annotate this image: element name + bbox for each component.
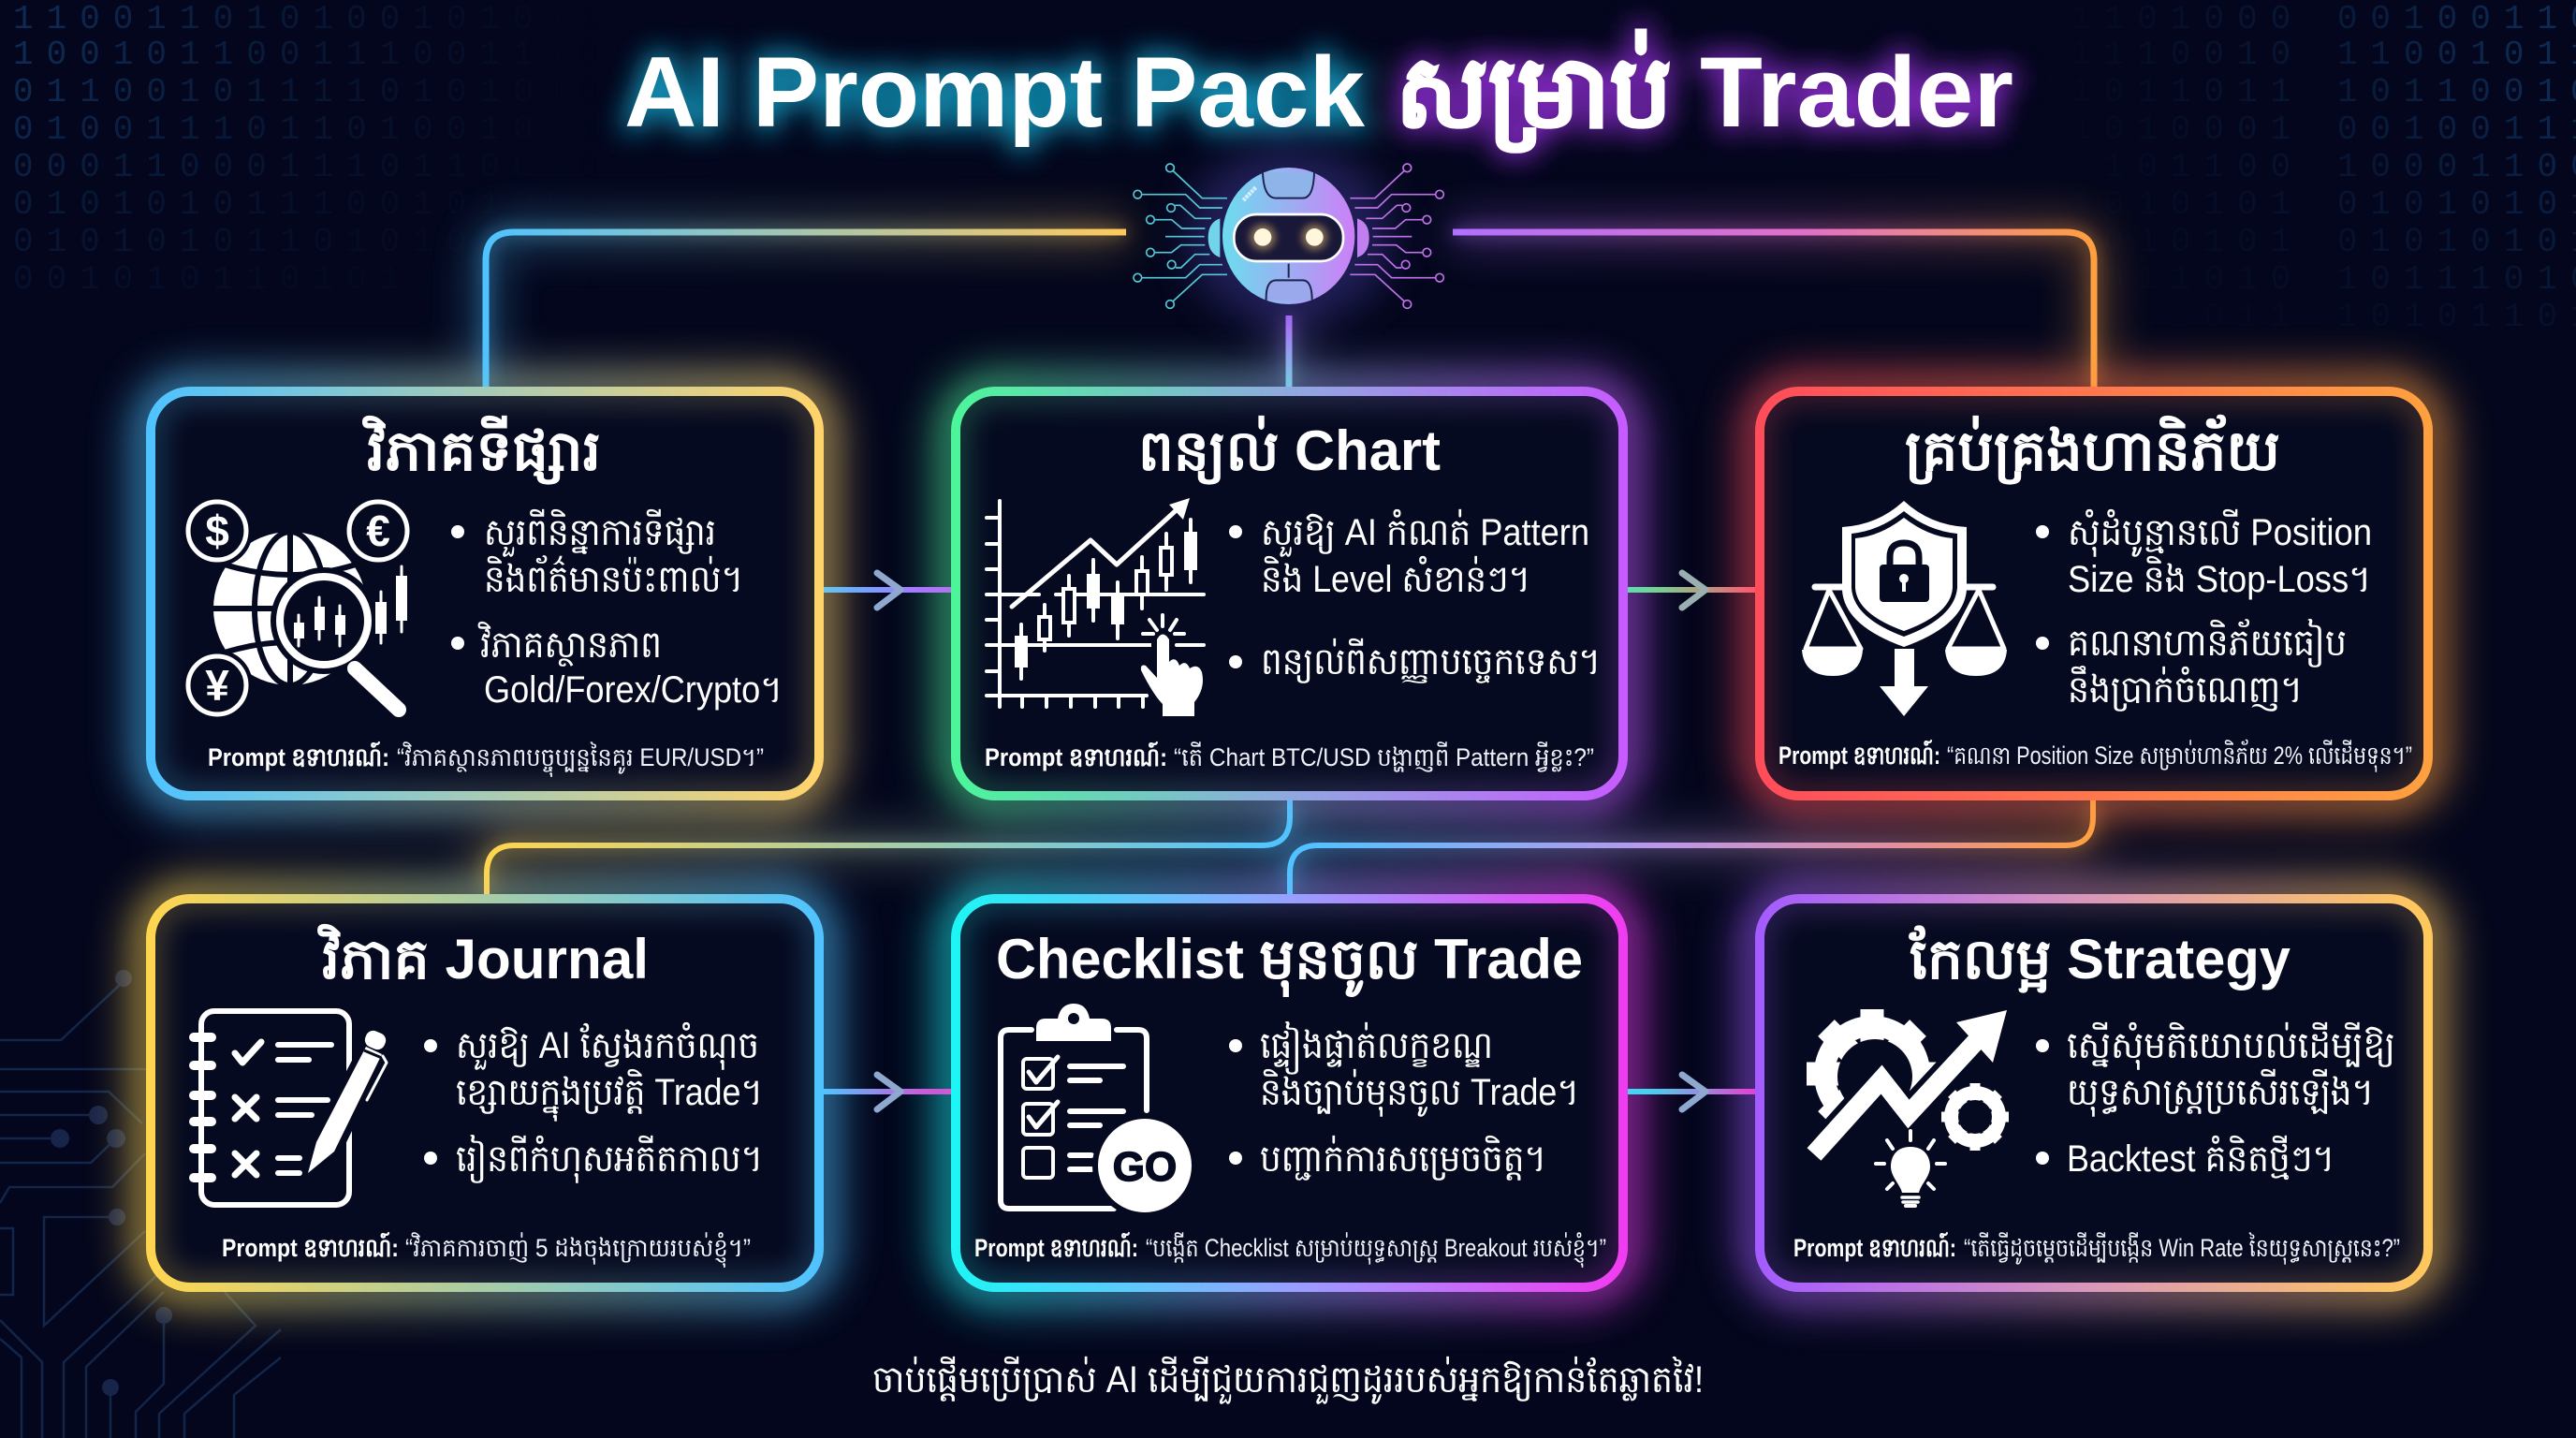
prompt example: improve strategy: “តើធ្វើដូចម្តេចដើម្បីបង្កើន Win Rate នៃយុទ្ធសាស្ត្រនេះ?” (1964, 1232, 2400, 1265)
bullet list: risk management (2036, 508, 2372, 712)
bullet list: journal analysis: ខ្សោយក្នុងប្រវត្តិ Trade។ (456, 1068, 763, 1122)
bullet list: risk management: សុំដំបូន្មានលើ Position (2068, 508, 2372, 557)
connector: robot to market analysis card (486, 232, 1126, 387)
bullet list: checklist before trade: និងច្បាប់មុនចូល Trade។ (1260, 1068, 1579, 1117)
prompt example: checklist before trade: “បង្កើត Checklist សម្រាប់យុទ្ធសាស្ត្រ Breakout របស់ខ្ញុំ។” (1146, 1232, 1606, 1268)
binary pattern top left: 001010110101010011 (13, 260, 613, 299)
icon: clipboard with GO badge: GO (1113, 1144, 1177, 1190)
title: Trader (1700, 36, 2013, 148)
icon: clipboard with GO badge (1001, 1004, 1197, 1218)
bullet list: market analysis: វិភាគស្ថានភាព (477, 621, 662, 667)
bullet list: journal analysis: សួរឱ្យ AI ស្វែងរកចំណុច (456, 1021, 759, 1070)
panel: improve strategy (1760, 899, 2428, 1287)
binary pattern top left: 100101100111001110 (13, 36, 613, 74)
arrow: chart to risk (1628, 573, 1755, 608)
bullet list: chart explanation: សួរឱ្យ AI កំណត់ Pattern (1261, 508, 1589, 557)
panel: journal analysis (151, 899, 819, 1287)
icon: gears, rising arrow and light bulb (1807, 1009, 2009, 1206)
prompt example: journal analysis (222, 1231, 751, 1268)
bullet list: market analysis: និងព័ត៌មានប៉ះពាល់។ (484, 555, 743, 600)
title: Trader (1700, 36, 2013, 148)
bullet list: risk management: គណនាហានិភ័យធៀប (2068, 618, 2347, 668)
binary pattern top left: 011001011110101010 (13, 73, 613, 111)
connector: chart card to journal card (487, 800, 1290, 894)
title: AI Prompt Pack (624, 36, 1365, 148)
title (624, 29, 2013, 153)
connector: robot to chart card (1286, 315, 1292, 387)
prompt example: chart explanation: Prompt ឧទាហរណ៍: (985, 741, 1167, 771)
binary pattern top left: 110011010100101011 (13, 0, 613, 38)
binary pattern top left (15, 6, 494, 288)
icon: globe with magnifier and currencies: $ (205, 506, 229, 555)
arrow: checklist to strategy (1628, 1075, 1755, 1109)
prompt example: improve strategy: Prompt ឧទាហរណ៍: (1793, 1231, 1956, 1262)
binary pattern top left: 010101011010101101 (13, 223, 613, 261)
bullet list: improve strategy: ស្នើសុំមតិយោបល់ដើម្បីឱ្យ (2067, 1021, 2395, 1070)
panel: chart explanation (956, 391, 1623, 796)
icon: globe with magnifier and currencies (182, 495, 414, 721)
heading: journal analysis: វិភាគ Journal (317, 923, 649, 990)
icon: shield, lock and scales (1802, 501, 2007, 716)
bullet list: improve strategy (2036, 1021, 2395, 1181)
bullet list: chart explanation: ពន្យល់ពីសញ្ញាបច្ចេកទេស។ (1261, 638, 1601, 683)
prompt example: market analysis: “វិភាគស្ថានភាពបច្ចុប្បន្ននៃគូរ EUR/USD។” (397, 741, 764, 777)
bullet list: chart explanation (1229, 508, 1601, 683)
bullet list: chart explanation: និង Level សំខាន់ៗ។ (1261, 555, 1530, 600)
prompt example: improve strategy (1793, 1231, 2400, 1265)
bullet list: improve strategy: យុទ្ធសាស្ត្រប្រសើរឡើង។ (2067, 1068, 2374, 1117)
prompt example: checklist before trade (974, 1231, 1606, 1268)
icon: globe with magnifier and currencies: ¥ (205, 661, 229, 710)
prompt example: risk management: Prompt ឧទាហរណ៍: (1778, 739, 1940, 770)
prompt example: risk management: “គណនា Position Size សម្រាប់ហានិភ័យ 2% លើដើមទុន។” (1947, 739, 2412, 772)
panel: market analysis (151, 391, 819, 796)
bullet list: journal analysis: រៀនពីកំហុសអតីតកាល។ (456, 1134, 763, 1183)
icon: globe with magnifier and currencies: € (366, 506, 390, 555)
prompt example: chart explanation (985, 741, 1594, 772)
prompt example: market analysis (208, 741, 764, 777)
heading: checklist before trade: Checklist មុនចូល Trade (996, 928, 1583, 997)
icon: notebook with pen (194, 1011, 388, 1205)
bullet list: checklist before trade: ផ្ទៀងផ្ទាត់លក្ខខណ្ឌ (1260, 1020, 1493, 1075)
prompt example: journal analysis: “វិភាគការចាញ់ 5 ដងចុងក្រោយរបស់ខ្ញុំ។” (405, 1232, 751, 1268)
panel: risk management (1760, 391, 2428, 796)
prompt example: checklist before trade: Prompt ឧទាហរណ៍: (974, 1231, 1138, 1262)
title: AI Prompt Pack (624, 36, 1365, 148)
binary pattern top left: 000110001110110010 (13, 148, 613, 186)
prompt example: journal analysis: Prompt ឧទាហរណ៍: (222, 1231, 399, 1262)
connector: risk card to checklist card (1290, 800, 2093, 894)
footer call to action: ចាប់ផ្តើមប្រើប្រាស់ AI ដើម្បីជួយការជួញដូររបស់អ្នកឱ្យកាន់តែឆ្លាតវៃ! (872, 1356, 1704, 1404)
prompt example: risk management (1778, 739, 2412, 772)
bullet list: checklist before trade (1229, 1020, 1579, 1181)
title: សម្រាប់ (1396, 29, 1672, 153)
prompt example: chart explanation: “តើ Chart BTC/USD បង្ហាញពី Pattern អ្វីខ្លះ?” (1174, 741, 1594, 772)
heading: risk management: គ្រប់គ្រងហានិភ័យ (1905, 414, 2280, 485)
bullet list: journal analysis (424, 1021, 763, 1183)
title: សម្រាប់ (1396, 29, 1672, 153)
icon: candlestick chart with pointer (987, 498, 1204, 716)
connector glow layer (146, 232, 2433, 1292)
bullet list: checklist before trade: បញ្ជាក់ការសម្រេចចិត្ត។ (1260, 1135, 1546, 1181)
bullet list: market analysis: សួរពីនិន្នាការទីផ្សារ (484, 508, 716, 557)
panel: checklist before trade (956, 899, 1623, 1287)
prompt example: market analysis: Prompt ឧទាហរណ៍: (208, 741, 389, 771)
icon: robot head (1134, 147, 1443, 325)
heading: improve strategy: កែលម្អ Strategy (1909, 925, 2291, 993)
arrow: market to chart (824, 573, 951, 608)
binary pattern top left: 010101011100101001 (13, 185, 613, 224)
bullet list: market analysis (451, 508, 783, 711)
bullet list: market analysis: Gold/Forex/Crypto។ (484, 669, 783, 711)
binary pattern top left: 010011101101001011 (13, 110, 613, 149)
bullet list: risk management: Size និង Stop-Loss។ (2068, 555, 2371, 600)
heading: market analysis: វិភាគទីផ្សារ (362, 415, 601, 485)
arrow: journal to checklist (824, 1075, 951, 1109)
bullet list: risk management: នឹងប្រាក់ចំណេញ។ (2068, 665, 2303, 712)
circuit pattern bottom left (0, 970, 281, 1438)
binary pattern top right (2118, 6, 2576, 326)
heading: chart explanation: ពន្យល់ Chart (1138, 415, 1441, 485)
connector: robot to risk card (1453, 232, 2094, 387)
bullet list: improve strategy: Backtest គំនិតថ្មីៗ។ (2067, 1135, 2334, 1181)
